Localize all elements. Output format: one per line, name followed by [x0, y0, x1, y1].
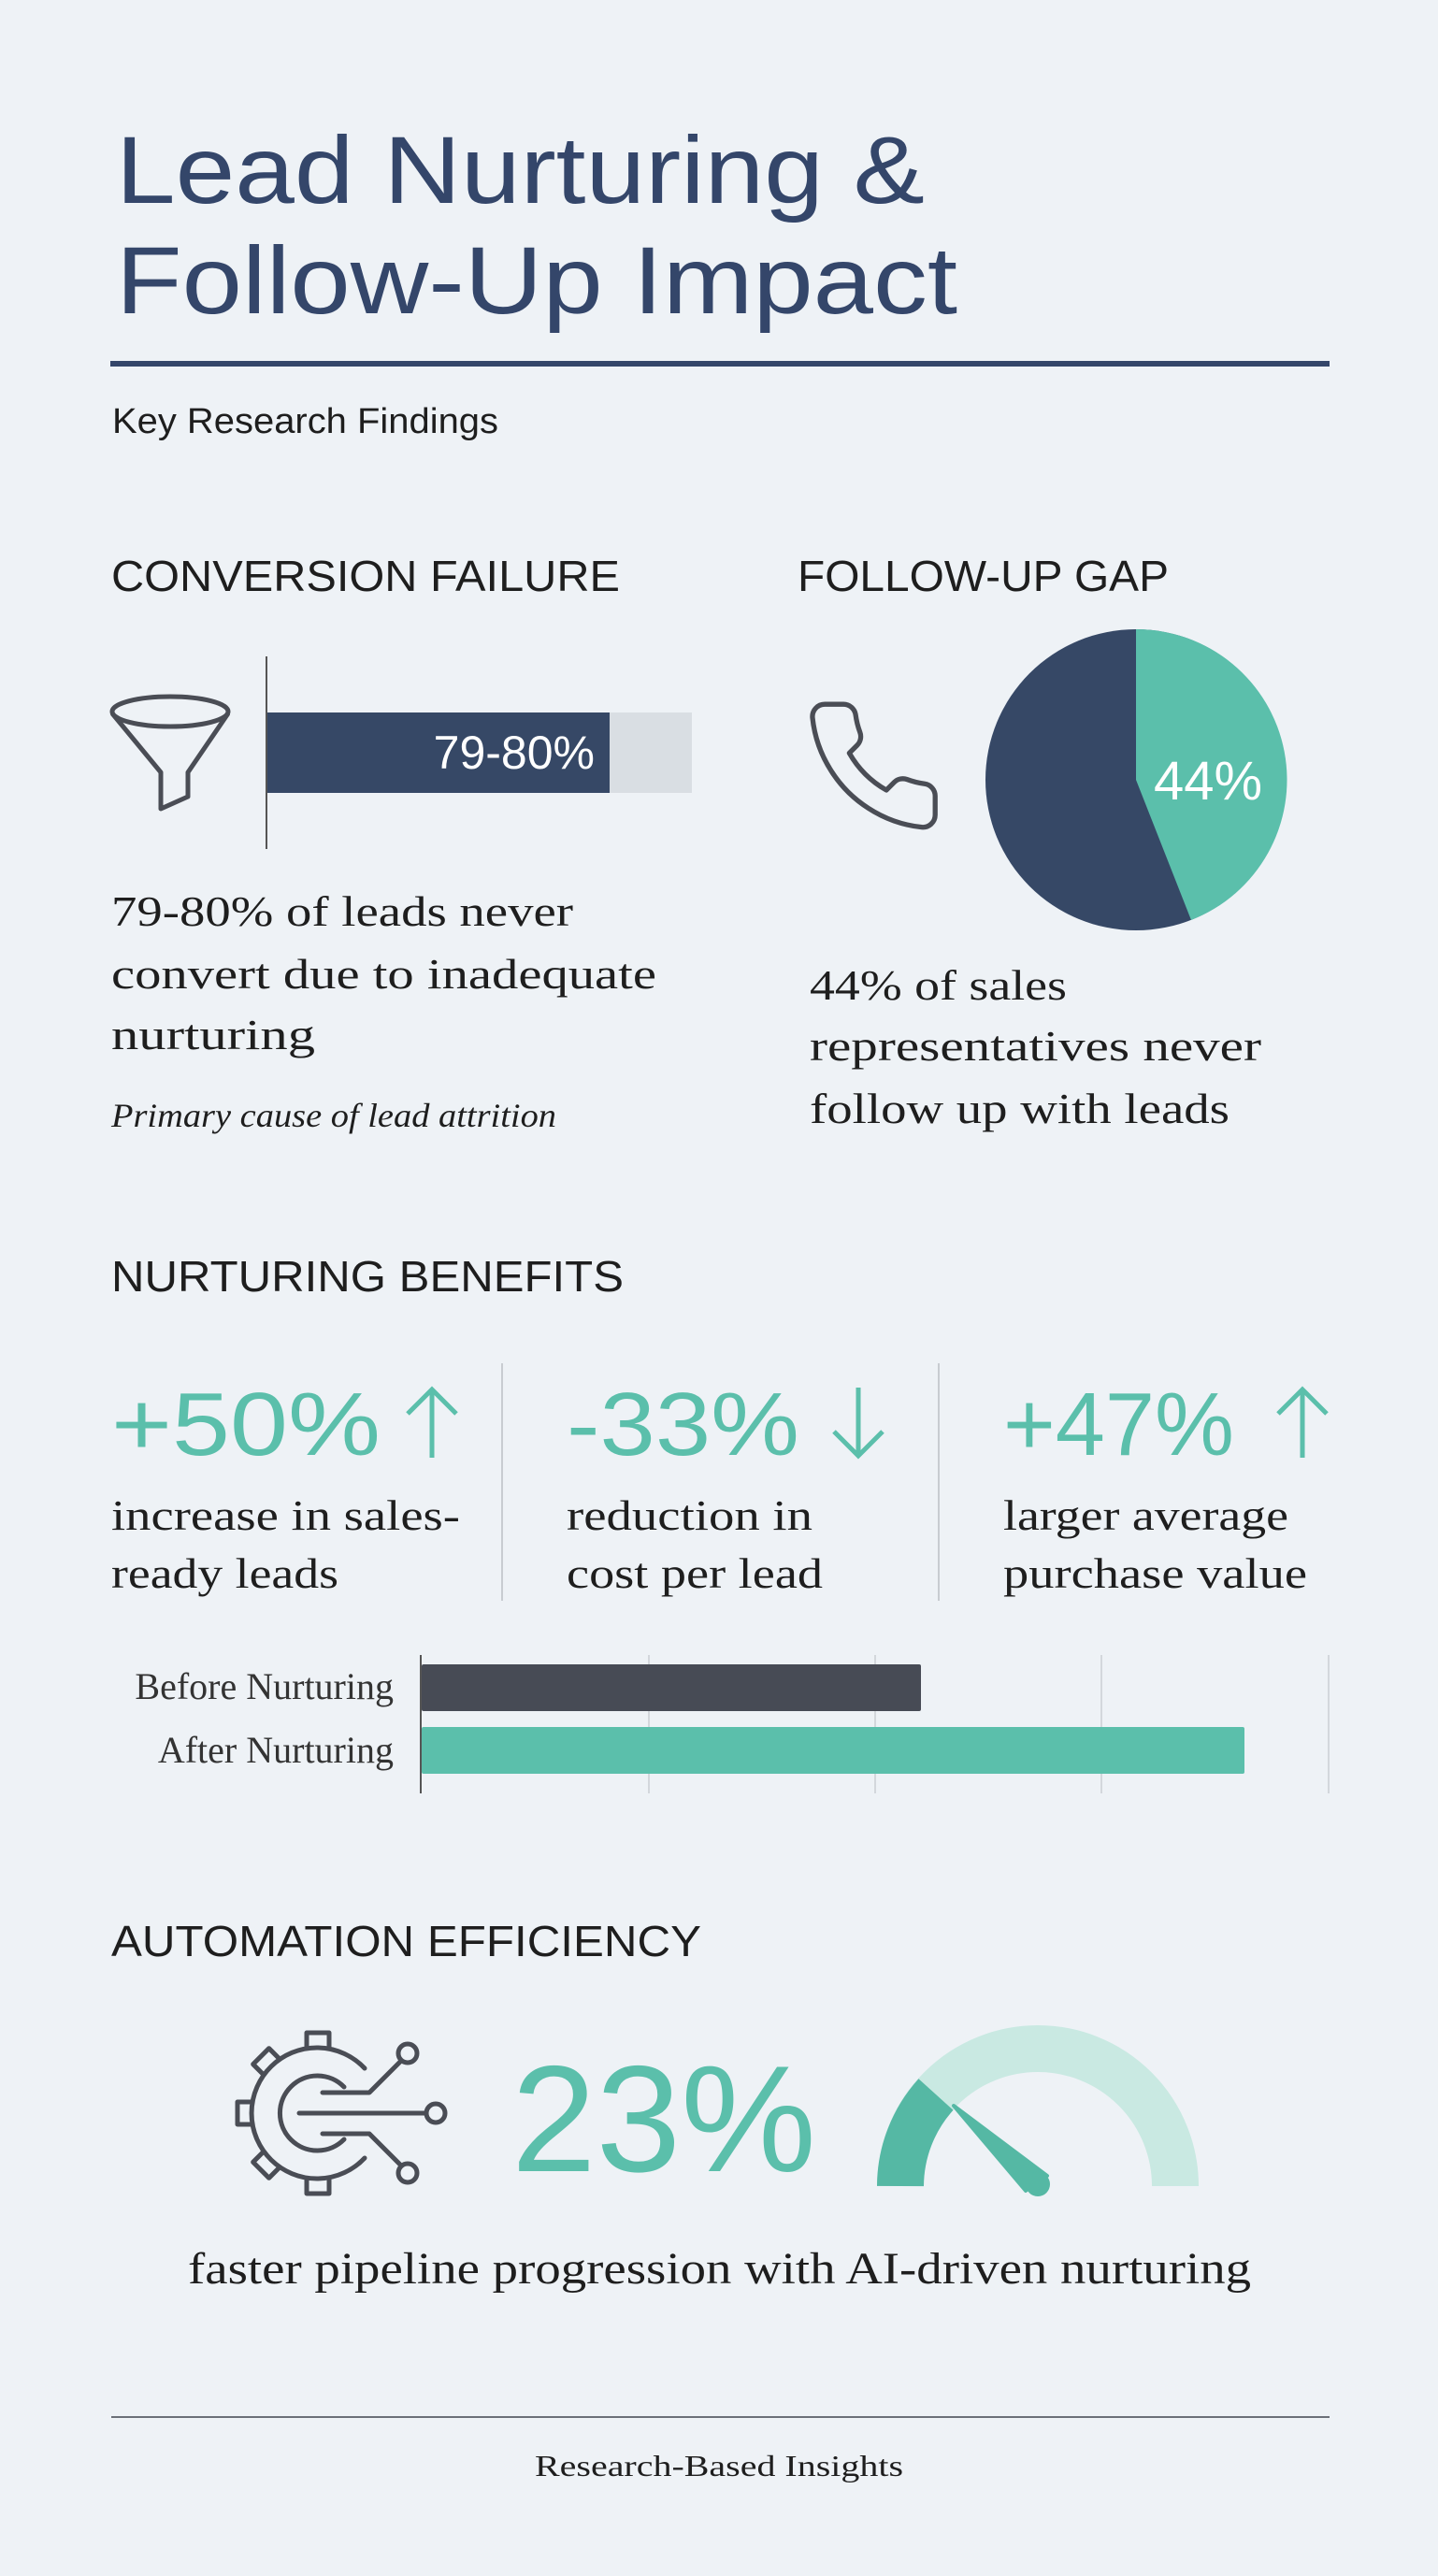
title: Follow-Up Impact — [116, 227, 957, 334]
icon: phone — [812, 704, 935, 827]
panel: conversion failure — [110, 552, 692, 1134]
icon: up arrow — [1278, 1389, 1327, 1458]
stat: +50% — [111, 1374, 460, 1597]
icon: gear circuit — [237, 2033, 445, 2194]
text: follow-up stat: follow up with leads — [810, 1085, 1229, 1132]
footer: Research-Based Insights — [535, 2449, 903, 2482]
caption: automation: faster pipeline progression with AI-driven nurturing — [188, 2244, 1251, 2294]
text: follow-up stat: representatives never — [810, 1022, 1261, 1070]
icon: funnel — [112, 697, 228, 809]
stat: -33%: cost per lead — [567, 1549, 823, 1597]
stat: +50%: increase in sales- — [111, 1491, 460, 1539]
pie chart: 44%: 44% — [1154, 751, 1262, 812]
stat: -33%: reduction in — [567, 1491, 812, 1539]
text: conversion stat — [111, 887, 656, 1058]
bar chart: before vs after nurturing: After Nurturing — [158, 1729, 394, 1771]
stat: +47%: purchase value — [1003, 1549, 1307, 1597]
text: follow-up stat: 44% of sales — [810, 961, 1067, 1009]
heading: automation efficiency: AUTOMATION EFFICIENCY — [111, 1917, 701, 1965]
bar chart: before vs after nurturing — [135, 1655, 1329, 1793]
text: follow-up stat — [810, 961, 1261, 1132]
stat: +47%: larger average — [1003, 1491, 1288, 1539]
stat: +50%: +50% — [111, 1374, 381, 1475]
stat: -33%: -33% — [567, 1374, 799, 1475]
icon: up arrow — [408, 1389, 456, 1458]
stat: +47%: +47% — [1003, 1374, 1234, 1475]
icon: down arrow — [834, 1388, 883, 1456]
text: conversion stat: convert due to inadequate — [111, 950, 656, 998]
title: Lead Nurturing & — [116, 117, 925, 223]
stat: +47% — [1003, 1374, 1327, 1597]
title — [116, 117, 957, 334]
caption: primary cause: Primary cause of lead attrition — [110, 1097, 556, 1134]
bar chart: 79-80%: 79-80% — [434, 727, 595, 779]
icon: gauge — [900, 2049, 1175, 2196]
subtitle: Key Research Findings — [112, 402, 498, 441]
heading: follow-up gap: FOLLOW-UP GAP — [798, 552, 1169, 600]
heading: conversion failure: CONVERSION FAILURE — [111, 552, 620, 600]
text: conversion stat: 79-80% of leads never — [111, 887, 573, 935]
pie chart: 44% — [985, 629, 1287, 930]
heading: nurturing benefits: NURTURING BENEFITS — [111, 1252, 624, 1301]
text: conversion stat: nurturing — [111, 1011, 315, 1058]
stat: -33% — [567, 1374, 883, 1597]
stat: 23%: 23% — [511, 2035, 816, 2204]
stat: +50%: ready leads — [111, 1549, 338, 1597]
bar chart: before vs after nurturing: Before Nurturing — [135, 1665, 394, 1707]
panel: follow-up gap — [798, 552, 1287, 1132]
bar chart: 79-80% — [266, 656, 692, 849]
